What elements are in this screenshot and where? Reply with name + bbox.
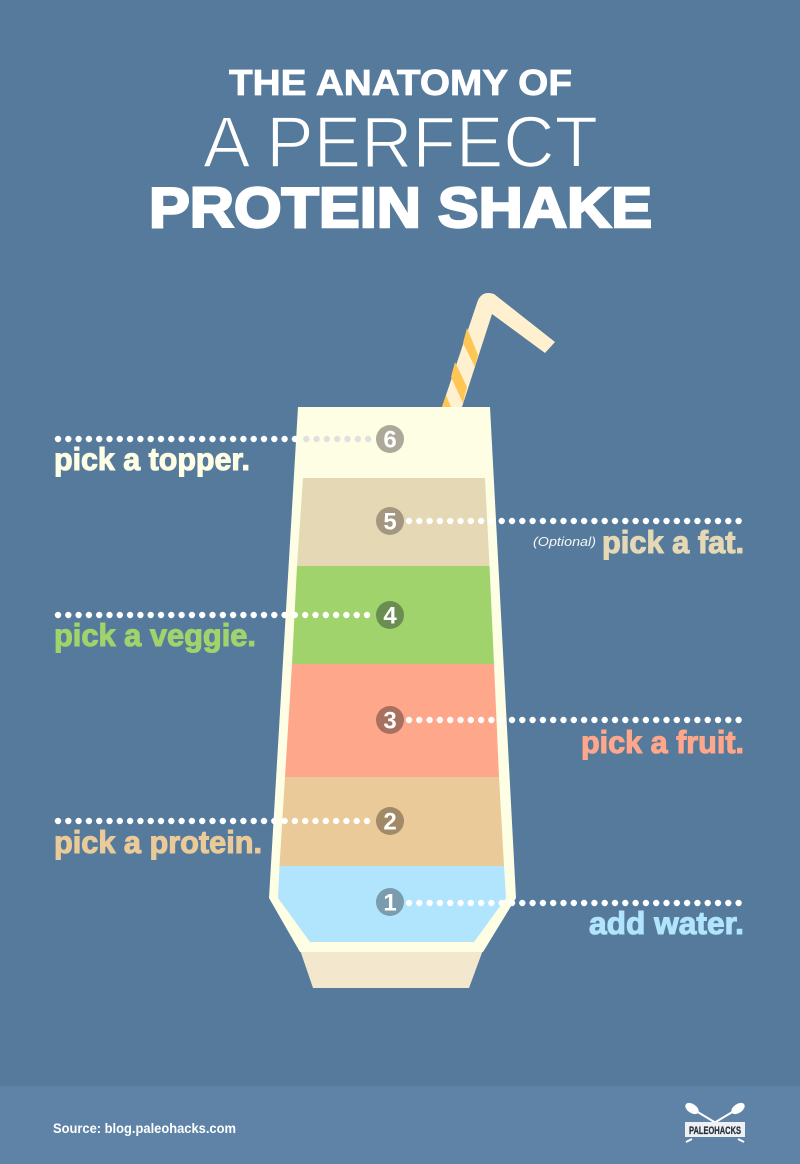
icon: paleohacks logo: [683, 1101, 747, 1142]
callout 4: pick a veggie: 4: [383, 602, 397, 630]
callout 2: pick a protein: pick a protein.: [54, 824, 262, 860]
callout 2: pick a protein: [54, 807, 404, 860]
title line: protein shake: PROTEIN SHAKE: [149, 176, 652, 239]
callout 3: pick a fruit: pick a fruit.: [581, 724, 744, 760]
callout 1: add water: add water.: [589, 905, 744, 941]
callout 3: pick a fruit: 3: [383, 708, 397, 734]
callout 4: pick a veggie: [54, 601, 404, 653]
footer band: [0, 1086, 800, 1164]
callout 6: pick a topper: pick a topper.: [54, 441, 250, 477]
callout 1: add water: 1: [383, 890, 397, 916]
callout 1: add water: [376, 888, 744, 941]
layer 3: fruit: [285, 664, 499, 777]
title: [149, 62, 652, 239]
callout 6: pick a topper: 6: [383, 426, 397, 454]
icon: paleohacks logo: PALEOHACKS: [689, 1125, 741, 1137]
callout 3: pick a fruit: [376, 706, 744, 760]
icon: glass base: [300, 950, 483, 988]
layer 5: fat: [297, 478, 490, 566]
callout 5: pick a fat: pick a fat.: [602, 524, 744, 560]
callout 6: pick a topper: [54, 425, 404, 477]
callout 2: pick a protein: 2: [383, 808, 397, 836]
layer 2: protein: [280, 777, 504, 866]
title line: a perfect: A PERFECT: [203, 103, 598, 183]
source credit: Source: blog.paleohacks.com: [53, 1121, 236, 1136]
callout 5: pick a fat: (Optional): [533, 534, 596, 549]
icon: glass body: [269, 407, 516, 952]
callout 4: pick a veggie: pick a veggie.: [54, 617, 256, 653]
callout 5: pick a fat: 5: [383, 508, 397, 536]
layer 4: veggie: [292, 566, 494, 664]
title line: the anatomy of: THE ANATOMY OF: [229, 62, 572, 103]
callout 5: pick a fat: [376, 507, 744, 560]
layer 1: water: [278, 866, 506, 942]
icon: striped straw: [442, 293, 555, 407]
